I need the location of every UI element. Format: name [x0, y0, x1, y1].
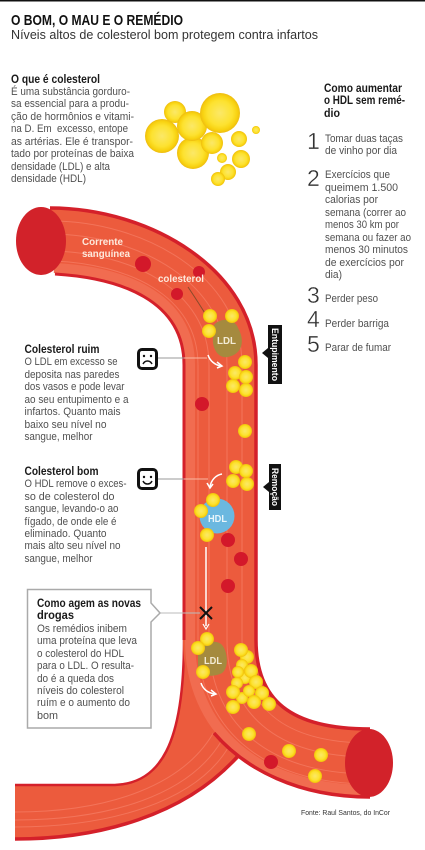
- text block: colesterol ruim: Colesterol ruim: [24, 342, 100, 356]
- cholesterol on HDL: [194, 493, 220, 542]
- leader line: colesterol: [188, 287, 206, 315]
- text block: o que é colesterol: densidade (LDL) e alta: [11, 161, 111, 173]
- text block: colesterol ruim: sangue, melhor: [24, 431, 93, 443]
- arrow: LDL bottom: [201, 683, 216, 696]
- callout: como agem as novas drogas: do é a queda dos: [37, 673, 114, 685]
- HDL blob: [200, 498, 234, 534]
- text block: colesterol bom: eliminado. Quanto: [24, 528, 106, 540]
- LDL blob: bottom: [198, 642, 227, 676]
- callout: como agem as novas drogas: bom: [37, 710, 58, 722]
- text block: como aumentar o HDL: 2: [307, 165, 320, 191]
- text block: como aumentar o HDL: Tomar duas taças: [325, 133, 403, 145]
- tag: remoção: [263, 464, 281, 510]
- tag: entupimento: Entupimento: [269, 328, 280, 381]
- text block: colesterol bom: so de colesterol do: [24, 491, 114, 503]
- text block: o que é colesterol: [11, 72, 135, 185]
- connector inside vessel: colesterol ruim: [184, 357, 207, 359]
- label: corrente sanguínea: [82, 236, 130, 260]
- connector inside vessel: colesterol bom: [184, 478, 208, 480]
- connector: colesterol bom: [158, 478, 184, 480]
- text block: como aumentar o HDL: semana ou fazer ao: [325, 232, 411, 244]
- connector: colesterol ruim: [158, 357, 184, 359]
- connector: callout to X: [160, 612, 200, 614]
- text block: como aumentar o HDL: Parar de fumar: [325, 342, 391, 354]
- arrow: LDL deposit: [208, 355, 222, 368]
- callout: como agem as novas drogas: Os remédios inibem: [37, 623, 127, 635]
- text block: como aumentar o HDL: Exercícios que: [325, 169, 390, 181]
- text block: colesterol bom: [24, 464, 127, 565]
- callout: como agem as novas drogas: [28, 590, 160, 728]
- text block: o que é colesterol: densidade (HDL): [11, 173, 86, 185]
- text block: como aumentar o HDL: Perder barriga: [325, 318, 390, 330]
- text block: colesterol bom: mais alto seu nível no: [24, 540, 120, 552]
- text block: como aumentar o HDL: 1: [307, 128, 320, 154]
- text block: o que é colesterol: sa essencial para a produ-: [11, 98, 129, 110]
- LDL blob: top: [213, 320, 242, 357]
- text block: colesterol bom: sangue, levando-o ao: [24, 503, 118, 515]
- text block: como aumentar o HDL: 4: [307, 306, 320, 332]
- text block: como aumentar o HDL: 5: [307, 331, 320, 357]
- text block: como aumentar o HDL: Como aumentar: [324, 81, 402, 95]
- callout: como agem as novas drogas: para o LDL. O resulta-: [37, 660, 134, 672]
- text block: como aumentar o HDL: Perder peso: [325, 293, 378, 305]
- tag: entupimento: [262, 325, 282, 384]
- HDL blob: HDL: [208, 513, 228, 525]
- text block: colesterol ruim: [24, 342, 129, 443]
- text block: o que é colesterol: É uma substância gorduro-: [11, 85, 130, 98]
- callout: como agem as novas drogas: drogas: [37, 608, 74, 622]
- cholesterol cluster: remoção: [226, 460, 254, 491]
- text block: como aumentar o HDL: dio: [324, 106, 340, 120]
- icon: cholesterol bubbles: [145, 93, 260, 186]
- text block: como aumentar o HDL: semana (correr ao: [325, 207, 406, 219]
- blood vessel: [15, 207, 393, 840]
- callout: como agem as novas drogas: uma proteína que leva: [37, 635, 138, 647]
- callout: como agem as novas drogas: ruím e o aumento do: [37, 697, 130, 709]
- text block: o que é colesterol: as artérias. Ele é transpor-: [11, 136, 133, 148]
- text block: como aumentar o HDL: menos 30 minutos: [325, 244, 408, 256]
- arrow: HDL removal: [207, 474, 222, 488]
- text block: colesterol ruim: deposita nas paredes: [24, 369, 120, 381]
- label: corrente sanguínea: Corrente: [82, 236, 123, 248]
- main vessel: [50, 207, 370, 797]
- text block: como aumentar o HDL: de exercícios por: [325, 257, 404, 269]
- callout: como agem as novas drogas: Como agem as novas: [37, 596, 141, 610]
- text block: colesterol bom: Colesterol bom: [24, 464, 98, 478]
- label: colesterol: colesterol: [158, 273, 204, 285]
- text block: como aumentar o HDL: calorias por: [325, 194, 378, 206]
- lower vessel branch: [15, 640, 240, 840]
- tag: remoção: Remoção: [269, 468, 280, 506]
- text block: como aumentar o HDL: 3: [307, 282, 320, 308]
- icon: sad face: [138, 350, 156, 368]
- icon: happy face: [138, 470, 156, 488]
- cholesterol cluster: bottom: [191, 632, 328, 783]
- callout: como agem as novas drogas: níveis do colesterol: [37, 685, 124, 697]
- text block: o que é colesterol: tado por proteínas de baixa: [11, 148, 135, 160]
- text block: como aumentar o HDL: menos 30 km por: [325, 219, 399, 231]
- arrow: HDL to LDL transfer blocked: [200, 547, 212, 629]
- text block: colesterol ruim: O LDL em excesso se: [24, 356, 118, 368]
- text block: colesterol bom: O HDL remove o exces-: [24, 478, 127, 490]
- text block: colesterol bom: sangue, melhor: [24, 553, 93, 565]
- LDL blob: top: LDL: [217, 335, 237, 347]
- text block: o que é colesterol: na D. Em excesso, entope: [11, 123, 128, 135]
- vessel opening: right: [345, 729, 393, 797]
- label: corrente sanguínea: sanguínea: [82, 248, 130, 260]
- text block: como aumentar o HDL: queimem 1.500: [325, 182, 398, 194]
- text block: como aumentar o HDL: o HDL sem remé-: [324, 93, 405, 107]
- text block: como aumentar o HDL: dia): [325, 269, 342, 281]
- vessel opening: left: [16, 207, 66, 275]
- subtitle: Níveis altos de colesterol bom protegem contra infartos: [11, 27, 318, 42]
- text block: como aumentar o HDL: [307, 81, 411, 357]
- text block: colesterol ruim: dos vasos e pode levar: [24, 381, 125, 393]
- red blood cells: [135, 256, 278, 769]
- text block: colesterol ruim: baixo seu nível no: [24, 419, 106, 431]
- text block: colesterol bom: fígado, de onde ele é: [24, 516, 116, 528]
- text block: colesterol ruim: ao seu entupimento e a: [24, 394, 129, 406]
- cholesterol cluster: entupimento: [202, 309, 253, 438]
- title: O BOM, O MAU E O REMÉDIO: [11, 12, 183, 29]
- source: Fonte: Raul Santos, do InCor: [301, 808, 390, 817]
- LDL blob: bottom: LDL: [204, 655, 223, 667]
- text block: colesterol ruim: infartos. Quanto mais: [24, 406, 121, 418]
- text block: o que é colesterol: ção de hormônios e vitami-: [11, 111, 134, 123]
- callout: como agem as novas drogas: o colesterol do HDL: [37, 648, 124, 660]
- text block: o que é colesterol: O que é colesterol: [11, 72, 100, 86]
- text block: como aumentar o HDL: de vinho por dia: [325, 145, 398, 157]
